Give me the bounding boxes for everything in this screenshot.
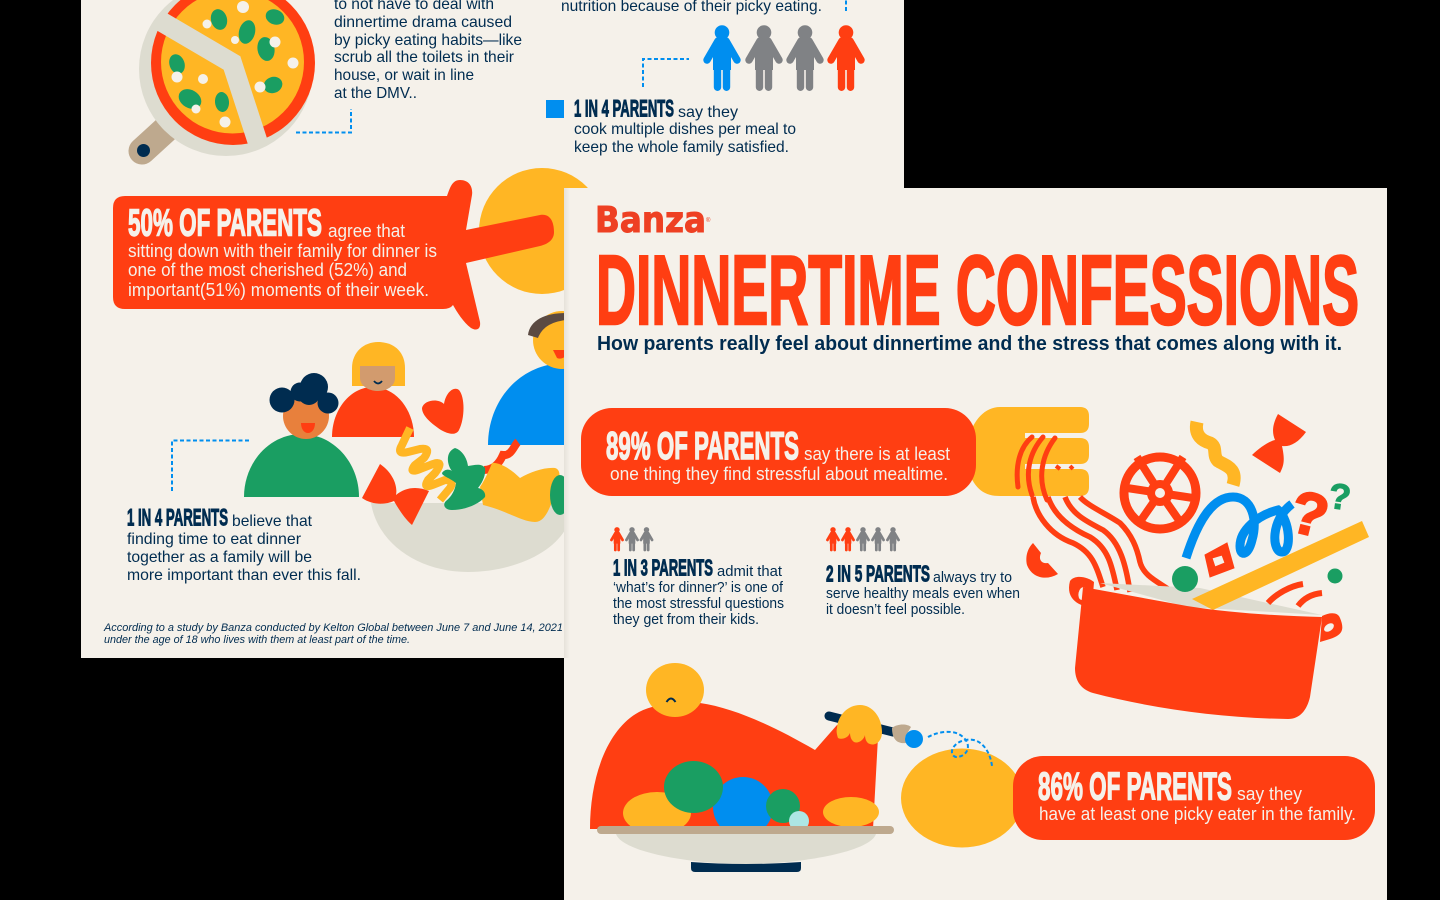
- icon: 2 in 5 people: [827, 527, 899, 550]
- text: pizza confession: dinnertime drama caused: [334, 14, 512, 31]
- icon: question marks: ?: [1284, 477, 1335, 551]
- icon: pizza in pan: [137, 0, 315, 157]
- icon: four people: [707, 25, 861, 87]
- text: footnote: under the age of 18 who lives with them at least part of the time.: [104, 634, 410, 646]
- text: pizza confession: house, or wait in line: [334, 67, 474, 84]
- callout: 89% of parents: say there is at least: [804, 444, 950, 464]
- text: 1 in 3 parents: 1 IN 3 PARENTS: [613, 554, 713, 580]
- callout: 50% of parents: [113, 180, 554, 330]
- callout: 89% of parents: [581, 408, 976, 496]
- icon: blue square: [546, 100, 564, 118]
- text: 1 in 4 believe: [127, 504, 361, 584]
- callout: 50% of parents: 50% OF PARENTS: [128, 202, 322, 244]
- icon: 1 in 3 people: [611, 527, 652, 550]
- callout: 86% of parents: 86% OF PARENTS: [1038, 766, 1232, 808]
- text: 1 in 4 believe: more important than ever this fall.: [127, 567, 361, 584]
- icon: red crescent: [1026, 543, 1058, 578]
- panel: back page: [81, 0, 904, 658]
- callout: 50% of parents: one of the most cherished (52%) and: [128, 260, 407, 280]
- illustration: fork and pot of noodles: [968, 407, 1369, 719]
- text: 2 in 5 parents: serve healthy meals even when: [826, 586, 1020, 602]
- text: 2 in 5 parents: 2 IN 5 PARENTS: [826, 560, 930, 586]
- logo: Banza: ®: [706, 217, 711, 224]
- callout: 86% of parents: have at least one picky eater in the family.: [1039, 804, 1356, 824]
- icon: red bowtie: [1252, 414, 1306, 473]
- icon: yellow plate: [901, 748, 1023, 848]
- callout: 86% of parents: say they: [1237, 784, 1302, 804]
- arrow: dotted pea trail: [928, 732, 992, 766]
- text: 1 in 4 cook multiple dishes: keep the whole family satisfied.: [574, 139, 789, 156]
- text: 1 in 4 believe: believe that: [232, 513, 313, 530]
- callout: 86% of parents: [1013, 756, 1375, 840]
- text: 1 in 4 cook multiple dishes: cook multiple dishes per meal to: [574, 121, 796, 138]
- icon: heart: [422, 389, 464, 434]
- text: 2 in 5 parents: always try to: [933, 570, 1012, 586]
- callout: 50% of parents: agree that: [328, 221, 405, 241]
- text: 1 in 3 parents: admit that: [717, 564, 782, 580]
- icon: salad bowl: [362, 428, 570, 572]
- text: footnote: According to a study by Banza conducted by Kelton Global between June 7 and June 14, 2021: [103, 622, 563, 634]
- callout: 89% of parents: one thing they find stressful about mealtime.: [610, 464, 948, 484]
- icon: family at table: [244, 311, 591, 497]
- callout: 89% of parents: 89% OF PARENTS: [606, 425, 799, 468]
- text: footnote: [103, 622, 563, 646]
- text: 1 in 3 parents: they get from their kids.: [613, 612, 759, 628]
- subtitle: How parents really feel about dinnertime and the stress that comes along with it.: [597, 332, 1342, 355]
- icon: yellow plate circle: [479, 168, 605, 294]
- text: 1 in 4 believe: together as a family will be: [127, 549, 312, 566]
- text: 1 in 3 parents: the most stressful questions: [613, 596, 784, 612]
- icon: rotelle wheel: [1124, 457, 1196, 529]
- callout: 50% of parents: important(51%) moments of their week.: [128, 280, 429, 300]
- callout: 50% of parents: sitting down with their family for dinner is: [128, 241, 437, 261]
- icon: yellow fusilli: [1196, 422, 1234, 485]
- text: 1 in 4 believe: finding time to eat dinner: [127, 531, 302, 548]
- logo: Banza: Banza: [595, 200, 706, 241]
- text: 2 in 5 parents: it doesn’t feel possible.: [826, 602, 965, 618]
- text: 2 in 5 parents: [826, 560, 1020, 618]
- text: 1 in 3 parents: [613, 554, 784, 628]
- text: pizza confession: scrub all the toilets in their: [334, 49, 515, 66]
- panel: front page: [564, 188, 1387, 900]
- illustration: turkey platter: [590, 663, 923, 872]
- text: 1 in 4 cook multiple dishes: [574, 96, 796, 156]
- text: pizza confession: by picky eating habits—like: [334, 32, 522, 49]
- text: 1 in 4 cook multiple dishes: 1 IN 4 PARENTS: [574, 96, 674, 122]
- text: 1 in 4 cook multiple dishes: say they: [678, 104, 738, 121]
- icon: question marks: ?: [1326, 475, 1354, 518]
- icon: blue squiggle: [1186, 497, 1292, 558]
- text: pizza confession: at the DMV..: [334, 85, 417, 102]
- text: 1 in 3 parents: ‘what’s for dinner?’ is one of: [613, 580, 784, 596]
- text: 1 in 4 believe: 1 IN 4 PARENTS: [127, 504, 228, 532]
- text: pizza confession: [334, 0, 522, 102]
